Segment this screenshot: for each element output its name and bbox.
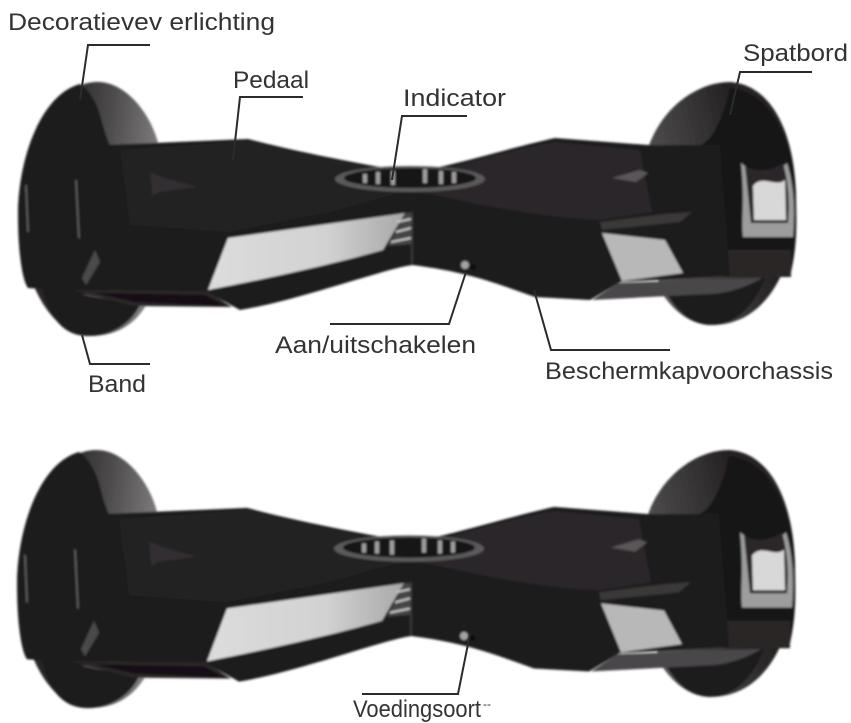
label: decorative lighting: Decoratievev erlichting bbox=[8, 9, 275, 36]
label: chassis cover: Beschermkapvoorchassis bbox=[545, 358, 833, 385]
label: indicator: Indicator bbox=[403, 85, 506, 112]
hoverboard: bottom view bbox=[17, 450, 795, 708]
label: power switch: Aan/uitschakelen bbox=[275, 332, 476, 359]
hoverboard: top view bbox=[18, 82, 796, 336]
leader lines bbox=[80, 45, 812, 694]
label: pedal: Pedaal bbox=[233, 67, 309, 94]
label: fender: Spatbord bbox=[743, 40, 848, 67]
label: power supply: Voedingsoort bbox=[353, 696, 481, 723]
mark after power supply label: -- bbox=[483, 697, 491, 711]
label: tyre: Band bbox=[88, 371, 146, 398]
